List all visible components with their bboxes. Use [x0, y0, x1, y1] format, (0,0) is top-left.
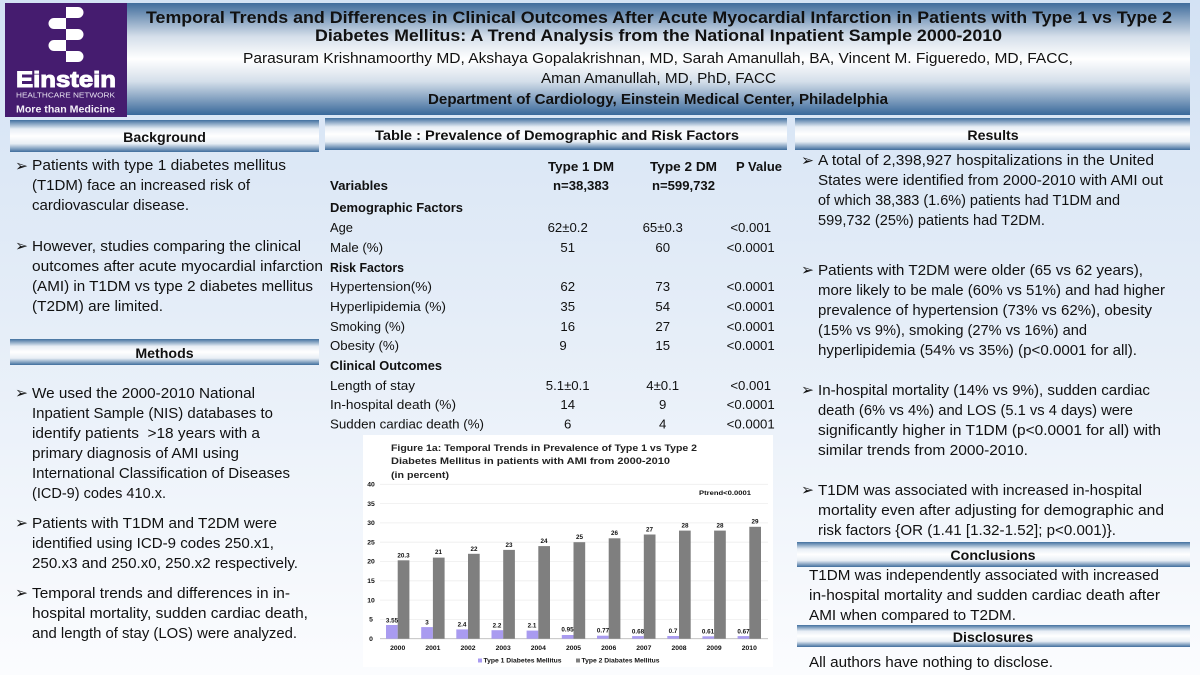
table: demographic and risk factors: 14 [560, 397, 575, 412]
data labels: Type 2 [397, 518, 759, 560]
x axis labels: 2002 [460, 645, 476, 652]
text block: results bullets: In-hospital mortality (14% vs 9%), sudden cardiac [818, 383, 1150, 399]
text block: results bullets: significantly higher in T1DM (p<0.0001 for all) with [818, 423, 1161, 439]
data labels: Type 2: 25 [576, 534, 583, 541]
text block: results bullets [801, 152, 1165, 539]
table: demographic and risk factors: Hypertension(%) [330, 279, 432, 294]
x axis labels: 2003 [496, 645, 511, 652]
text block: conclusions: AMI when compared to T2DM. [809, 608, 1016, 624]
text block: results bullets: death (6% vs 4%) and LOS (5.1 vs 4 days) were [818, 403, 1133, 419]
header banner [127, 3, 1190, 115]
text block: conclusions: in-hospital mortality and sudden cardiac death after [809, 588, 1160, 604]
data labels: Type 1: 0.95 [561, 626, 574, 634]
text block: results bullets: mortality even after adjusting for demographic and [818, 503, 1164, 519]
table: demographic and risk factors: 6 [564, 416, 571, 432]
y axis labels: 40 [367, 482, 375, 488]
logo: Einstein Healthcare Network: HEALTHCARE NETWORK [16, 93, 115, 100]
data labels: Type 1: 2.4 [458, 622, 467, 628]
table header row: Type 2 DM [650, 159, 717, 174]
table: demographic and risk factors: 62±0.2 [548, 220, 588, 235]
heading: Methods: Methods [135, 346, 194, 362]
authors: Parasuram Krishnamoorthy MD, Akshaya Gopalakrishnan, MD, Sarah Amanullah, BA, Vincent M. Figueredo, MD, FACC, [243, 50, 1073, 67]
x axis labels [390, 645, 757, 652]
heading: Table [325, 118, 787, 150]
x axis labels: 2001 [425, 645, 441, 652]
data labels: Type 2: 28 [716, 522, 724, 530]
table: demographic and risk factors: 51 [560, 240, 575, 255]
text block: background bullets: However, studies comparing the clinical [32, 239, 301, 255]
data labels: Type 2: 24 [540, 538, 548, 545]
table: demographic and risk factors: 9 [559, 338, 567, 353]
text block: background bullets: outcomes after acute myocardial infarction [32, 259, 323, 275]
heading: Disclosures [797, 625, 1190, 647]
table: demographic and risk factors: Demographic Factors [330, 200, 463, 215]
text block: methods bullets: International Classification of Diseases [32, 466, 290, 482]
text block: methods bullets: 250.x3 and 250.x0, 250.x2 respectively. [32, 556, 298, 572]
data labels: Type 1: 0.77 [597, 628, 610, 634]
text block: background bullets: (T2DM) are limited. [32, 299, 163, 315]
table header row [330, 159, 782, 193]
legend: Type 2 Diabates Mellitus [582, 658, 660, 664]
data labels: Type 2: 21 [435, 549, 442, 556]
table: demographic and risk factors: <0.0001 [727, 416, 775, 432]
table header row: n=599,732 [652, 178, 715, 193]
table: demographic and risk factors: In-hospital death (%) [330, 397, 456, 412]
text block: results bullets: ➢ [801, 261, 814, 279]
data labels: Type 1: 0.61 [702, 628, 715, 636]
text block: methods bullets: identify patients >18 years with a [32, 426, 261, 442]
text block: results bullets: T1DM was associated with increased in-hospital [818, 483, 1142, 499]
text block: methods bullets [15, 384, 308, 642]
text block: methods bullets: Temporal trends and differences in in- [32, 586, 290, 602]
text block: results bullets: ➢ [801, 481, 814, 499]
y axis labels: 20 [367, 559, 375, 566]
text block: methods bullets: (ICD-9) codes 410.x. [32, 486, 166, 502]
x axis labels: 2000 [390, 645, 405, 652]
data labels: Type 1: 3 [425, 620, 429, 626]
text block: results bullets: more likely to be male (60% vs 51%) and had higher [818, 283, 1165, 299]
title: Diabetes Mellitus: A Trend Analysis from the National Inpatient Sample 2000-2010 [315, 27, 1002, 45]
chart title: Diabetes Mellitus in patients with AMI from 2000-2010 [391, 455, 670, 466]
heading: Disclosures: Disclosures [953, 630, 1033, 646]
text block: methods bullets: identified using ICD-9 codes 250.x1, [32, 536, 274, 552]
table: demographic and risk factors: Sudden cardiac death (%) [330, 416, 484, 432]
chart title [391, 442, 697, 480]
text block: results bullets: (15% vs 9%), smoking (27% vs 16%) and [818, 323, 1087, 339]
table header row: Variables [330, 178, 388, 193]
x axis labels: 2008 [671, 645, 687, 652]
authors [243, 50, 1073, 87]
table: demographic and risk factors: <0.0001 [727, 338, 775, 353]
table: demographic and risk factors: Clinical Outcomes [330, 358, 442, 373]
text block: results bullets: ➢ [801, 152, 814, 170]
bars: Type 2 Diabetes Mellitus [398, 527, 761, 639]
text block: results bullets: Patients with T2DM were older (65 vs 62 years), [818, 263, 1143, 279]
table: demographic and risk factors: Smoking (%) [330, 319, 405, 334]
text block: results bullets: risk factors {OR (1.41 [1.32-1.52]; p<0.001)}. [818, 523, 1116, 539]
data labels: Type 1: 0.7 [669, 628, 678, 635]
data labels: Type 1: 2.2 [493, 622, 502, 630]
text block: methods bullets: ➢ [15, 384, 28, 402]
data labels: Type 1 [386, 618, 750, 636]
text block: methods bullets: hospital mortality, sudden cardiac death, [32, 606, 308, 622]
y axis labels [367, 482, 375, 643]
text block: results bullets: 599,732 (25%) patients had T2DM. [818, 213, 1045, 229]
data labels: Type 2: 29 [751, 518, 759, 526]
legend [478, 658, 660, 664]
logo: Einstein Healthcare Network: Einstein [16, 67, 116, 92]
heading: Results [795, 118, 1190, 150]
text block: background bullets: Patients with type 1 diabetes mellitus [32, 158, 286, 174]
text block: results bullets: similar trends from 2000-2010. [818, 443, 1028, 459]
table: demographic and risk factors: <0.0001 [727, 240, 775, 255]
logo: Einstein Healthcare Network: More than Medicine [16, 104, 115, 116]
heading: Methods [10, 339, 319, 365]
data labels: Type 1: 3.55 [386, 618, 399, 624]
table: demographic and risk factors: Obesity (%) [330, 338, 399, 353]
heading: Results: Results [967, 128, 1019, 144]
text block: methods bullets: ➢ [15, 584, 28, 602]
data labels: Type 1: 2.1 [528, 622, 537, 630]
data labels: Type 2: 22 [470, 546, 478, 553]
table: demographic and risk factors: 62 [560, 279, 575, 294]
table: demographic and risk factors: 65±0.3 [643, 220, 683, 235]
table: demographic and risk factors: 16 [560, 319, 575, 334]
heading: Conclusions [797, 542, 1190, 567]
text block: background bullets: (AMI) in T1DM vs type 2 diabetes mellitus [32, 279, 313, 295]
text block: background bullets: ➢ [15, 237, 28, 255]
text block: conclusions: T1DM was independently associated with increased [809, 568, 1159, 584]
table: demographic and risk factors: 35 [560, 299, 575, 314]
table: demographic and risk factors: <0.0001 [727, 299, 775, 314]
text block: results bullets: hyperlipidemia (54% vs 35%) (p<0.0001 for all). [818, 343, 1137, 359]
text block: methods bullets: We used the 2000-2010 National [32, 386, 255, 402]
table: demographic and risk factors: 4±0.1 [646, 378, 679, 393]
heading: Conclusions: Conclusions [950, 548, 1036, 564]
heading: Table: Table : Prevalence of Demographic and Risk Factors [375, 128, 739, 144]
department: Department of Cardiology, Einstein Medical Center, Philadelphia [428, 91, 889, 108]
table: demographic and risk factors: 15 [655, 338, 670, 353]
title [146, 9, 1172, 45]
heading: Background: Background [123, 130, 206, 146]
table: demographic and risk factors: Risk Factors [330, 260, 404, 275]
y axis labels: 25 [367, 539, 375, 546]
heading: Background [10, 120, 319, 152]
text block: background bullets [15, 157, 323, 315]
table: demographic and risk factors: 27 [655, 319, 670, 334]
Ptrend annotation: Ptrend<0.0001 [699, 490, 752, 497]
y axis labels: 35 [367, 501, 375, 508]
text block: results bullets: States were identified from 2000-2010 with AMI out [818, 173, 1163, 189]
data labels: Type 2: 27 [646, 526, 653, 534]
chart title: Figure 1a: Temporal Trends in Prevalence of Type 1 vs Type 2 [391, 442, 697, 453]
y axis labels: 0 [369, 636, 373, 643]
y axis labels: 10 [367, 597, 375, 604]
table: demographic and risk factors: Age [330, 220, 353, 235]
bars: Type 1 Diabetes Mellitus [386, 625, 749, 639]
y axis labels: 15 [367, 578, 375, 585]
table: demographic and risk factors: Male (%) [330, 240, 383, 255]
table: demographic and risk factors: <0.0001 [727, 319, 775, 334]
chart title: (in percent) [391, 469, 449, 480]
y axis labels: 5 [369, 617, 373, 624]
y axis labels: 30 [367, 520, 375, 527]
table: demographic and risk factors: <0.0001 [727, 279, 775, 294]
text block: methods bullets: and length of stay (LOS) were analyzed. [32, 626, 297, 642]
table: demographic and risk factors: 5.1±0.1 [546, 378, 590, 393]
text block: results bullets: prevalence of hypertension (73% vs 62%), obesity [818, 303, 1153, 319]
text block: results bullets: of which 38,383 (1.6%) patients had T1DM and [818, 193, 1120, 209]
data labels: Type 2: 28 [681, 522, 689, 530]
data labels: Type 1: 0.67 [737, 628, 750, 636]
authors: Aman Amanullah, MD, PhD, FACC [541, 70, 776, 87]
x axis labels: 2004 [531, 645, 546, 652]
data labels: Type 2: 20.3 [397, 552, 410, 560]
table: demographic and risk factors: <0.001 [730, 378, 771, 393]
table: demographic and risk factors: Hyperlipidemia (%) [330, 299, 446, 314]
table: demographic and risk factors: <0.001 [730, 220, 771, 235]
x axis labels: 2010 [742, 645, 757, 652]
text block: methods bullets: primary diagnosis of AMI using [32, 446, 239, 462]
text block: disclosures: All authors have nothing to disclose. [809, 655, 1053, 671]
text block: methods bullets: Patients with T1DM and T2DM were [32, 516, 277, 532]
x axis labels: 2007 [636, 645, 652, 652]
table header row: n=38,383 [553, 178, 609, 193]
logo: Einstein Healthcare Network [5, 3, 127, 117]
table: demographic and risk factors: 54 [655, 299, 670, 314]
x axis labels: 2009 [707, 645, 722, 652]
x axis labels: 2006 [601, 645, 616, 652]
table: demographic and risk factors: Length of stay [330, 378, 415, 393]
text block: results bullets: ➢ [801, 381, 814, 399]
legend: Type 1 Diabetes Mellitus [484, 658, 562, 664]
data labels: Type 1: 0.68 [632, 628, 645, 636]
chart: Figure 1a temporal trends [363, 435, 773, 667]
data labels: Type 2: 23 [505, 542, 513, 549]
table header row: P Value [736, 159, 782, 174]
table: demographic and risk factors: 9 [659, 397, 666, 412]
table: demographic and risk factors: 4 [659, 416, 666, 432]
text block: methods bullets: ➢ [15, 514, 28, 532]
table: demographic and risk factors [330, 159, 782, 432]
table header row: Type 1 DM [548, 159, 614, 174]
text block: background bullets: cardiovascular disease. [32, 198, 189, 214]
table: demographic and risk factors: <0.0001 [727, 397, 775, 412]
text block: background bullets: (T1DM) face an increased risk of [32, 178, 251, 194]
text block: methods bullets: Inpatient Sample (NIS) databases to [32, 406, 273, 422]
text block: results bullets: A total of 2,398,927 hospitalizations in the United [818, 153, 1154, 169]
x axis labels: 2005 [566, 645, 581, 652]
table: demographic and risk factors: 73 [655, 279, 670, 294]
title: Temporal Trends and Differences in Clinical Outcomes After Acute Myocardial Infarction in Patients with Type 1 vs Type 2 [146, 9, 1172, 27]
text block: background bullets: ➢ [15, 157, 28, 175]
table: demographic and risk factors: 60 [655, 240, 670, 255]
text block: conclusions [809, 568, 1160, 624]
data labels: Type 2: 26 [611, 530, 618, 537]
